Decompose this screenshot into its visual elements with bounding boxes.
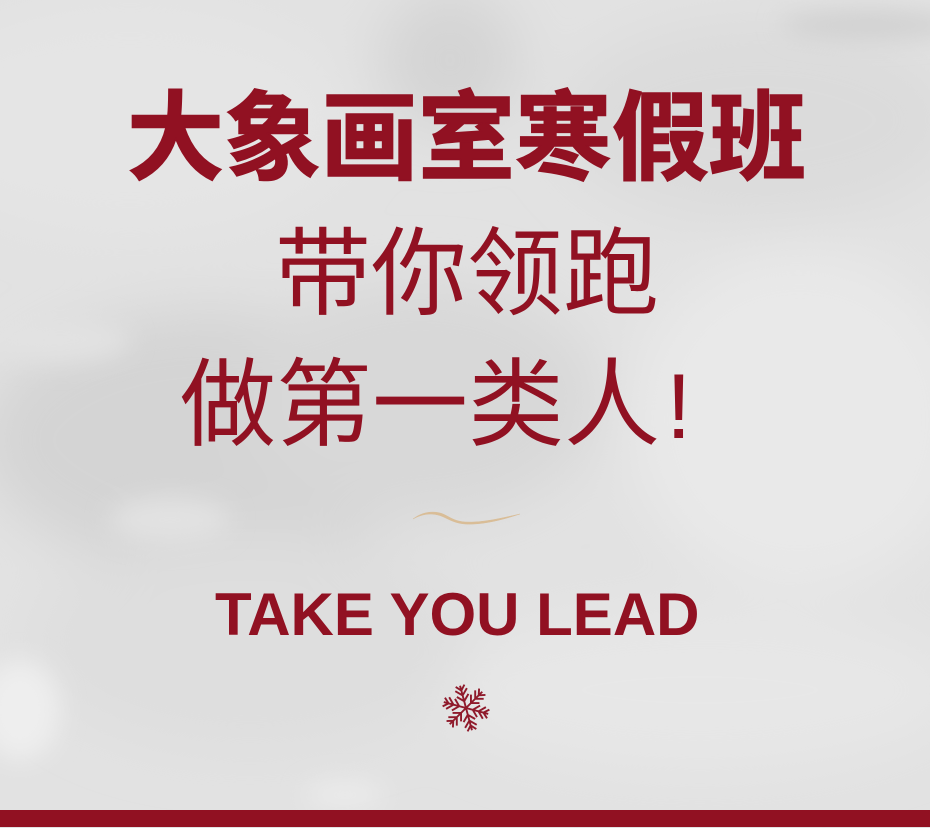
gold flourish divider — [413, 512, 520, 524]
bottom red bar — [0, 810, 930, 827]
subtitle line 2: 做第一类人!: 做第一类人! — [180, 352, 692, 459]
title: 大象画室寒假班: 大象画室寒假班 — [127, 84, 806, 193]
subtitle line 1: 带你领跑: 带你领跑 — [275, 221, 659, 328]
icon: snowflake — [442, 684, 490, 732]
English tagline: TAKE YOU LEAD — [215, 581, 699, 648]
